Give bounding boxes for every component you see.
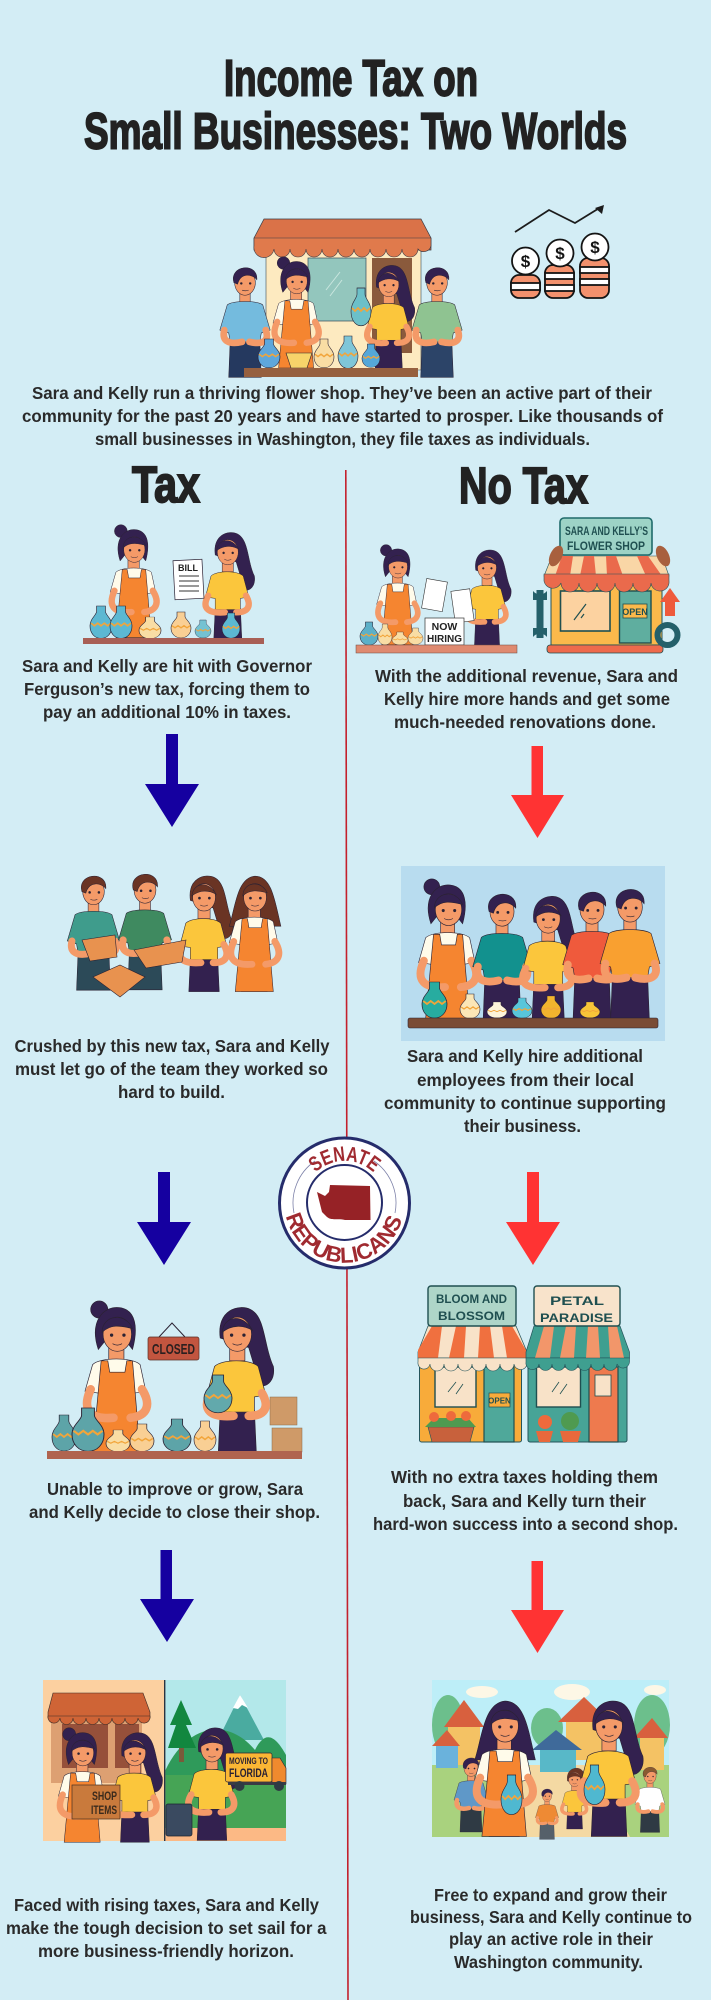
caption: Unable to improve or grow, Sara xyxy=(47,1479,303,1499)
arrow xyxy=(511,1561,564,1653)
intro text: Sara and Kelly run a thriving flower shop. They’ve been an active part of their xyxy=(32,383,652,403)
illustration: owners closing shop xyxy=(47,1301,302,1459)
arrow xyxy=(137,1172,191,1265)
icon: coin stacks with rising trend arrow: $ xyxy=(521,252,531,271)
title xyxy=(84,50,627,160)
heading: No Tax: No Tax xyxy=(459,457,588,514)
arrow xyxy=(145,734,199,827)
panel: no tax step 2 xyxy=(384,866,666,1265)
intro text: small businesses in Washington, they file taxes as individuals. xyxy=(95,429,590,449)
illustration: leaving shop and moving to Florida xyxy=(43,1680,286,1842)
panel: tax step 3 xyxy=(29,1301,320,1642)
caption xyxy=(14,1036,330,1102)
caption: Kelly hire more hands and get some xyxy=(384,689,670,709)
illustration: two flower shops: OPEN xyxy=(488,1396,511,1406)
panel: tax step 1 xyxy=(22,525,312,827)
intro text xyxy=(22,383,663,449)
illustration: growing team behind counter xyxy=(401,866,665,1041)
caption: Sara and Kelly hire additional xyxy=(407,1046,643,1066)
illustration: renovated flower shop: OPEN xyxy=(622,607,648,617)
illustration: staff packing boxes xyxy=(67,874,281,997)
caption: Washington community. xyxy=(454,1952,643,1972)
title: Income Tax on xyxy=(224,50,478,106)
panel: no tax step 1 xyxy=(356,518,680,838)
caption: Crushed by this new tax, Sara and Kelly xyxy=(14,1036,330,1056)
illustration: shop with owners and customers xyxy=(220,219,462,377)
caption: play an active role in their xyxy=(449,1929,653,1949)
caption: back, Sara and Kelly turn their xyxy=(403,1491,646,1511)
illustration: two flower shops: PETAL xyxy=(550,1294,604,1308)
illustration: leaving shop and moving to Florida: SHOP xyxy=(92,1791,117,1803)
caption: pay an additional 10% in taxes. xyxy=(43,702,291,722)
panel: tax step 2 xyxy=(14,874,330,1265)
logo: Senate Republicans xyxy=(278,1136,411,1270)
icon: coin stacks with rising trend arrow: $ xyxy=(555,244,565,263)
caption: With no extra taxes holding them xyxy=(391,1467,658,1487)
sign: closed xyxy=(148,1323,199,1360)
illustration: renovated flower shop: FLOWER SHOP xyxy=(567,539,645,553)
caption: more business-friendly horizon. xyxy=(38,1941,294,1961)
icon: coin stacks with rising trend arrow: $ xyxy=(590,238,600,257)
caption: Sara and Kelly are hit with Governor xyxy=(22,656,312,676)
caption: much-needed renovations done. xyxy=(394,712,656,732)
caption: and Kelly decide to close their shop. xyxy=(29,1502,320,1522)
illustration: leaving shop and moving to Florida: MOVING TO xyxy=(229,1756,268,1766)
illustration: worried owners reading bill: BILL xyxy=(178,563,198,574)
caption: hard-won success into a second shop. xyxy=(373,1514,678,1534)
caption: Faced with rising taxes, Sara and Kelly xyxy=(14,1895,319,1915)
caption xyxy=(373,1467,678,1534)
caption: community to continue supporting xyxy=(384,1093,666,1113)
sign: now hiring xyxy=(425,618,464,645)
arrow xyxy=(511,746,564,838)
intro text: community for the past 20 years and have started to prosper. Like thousands of xyxy=(22,406,663,426)
caption: must let go of the team they worked so xyxy=(15,1059,328,1079)
illustration: two flower shops xyxy=(418,1286,630,1442)
illustration: two flower shops: BLOOM AND xyxy=(436,1292,507,1306)
sign: now hiring: NOW xyxy=(432,621,457,633)
caption: their business. xyxy=(464,1116,581,1136)
panel: no tax step 4 xyxy=(410,1680,692,1972)
panel: no tax step 3 xyxy=(373,1286,678,1653)
caption: With the additional revenue, Sara and xyxy=(375,666,678,686)
illustration: renovated flower shop xyxy=(533,518,680,653)
arrow xyxy=(506,1172,560,1265)
arrow xyxy=(140,1550,194,1642)
caption: employees from their local xyxy=(417,1070,634,1090)
caption: Free to expand and grow their xyxy=(434,1885,667,1905)
illustration: renovated flower shop: SARA AND KELLY’S xyxy=(565,524,648,538)
caption xyxy=(384,1046,666,1136)
panel: tax step 4 xyxy=(6,1680,327,1961)
logo: Senate Republicans: SENATE xyxy=(308,1146,382,1172)
illustration: owners in thriving community xyxy=(432,1680,670,1839)
illustration: two flower shops: BLOSSOM xyxy=(438,1309,505,1323)
caption: Ferguson’s new tax, forcing them to xyxy=(24,679,310,699)
logo: Senate Republicans: REPUBLICANS xyxy=(286,1212,401,1263)
caption xyxy=(22,656,312,722)
caption: hard to build. xyxy=(118,1082,225,1102)
illustration: leaving shop and moving to Florida: ITEMS xyxy=(91,1805,117,1817)
sign: closed: CLOSED xyxy=(152,1341,195,1358)
illustration: two flower shops: PARADISE xyxy=(540,1311,613,1325)
heading: Tax: Tax xyxy=(132,456,200,513)
illustration: owners hiring xyxy=(356,545,517,653)
caption xyxy=(375,666,678,732)
caption xyxy=(410,1885,692,1972)
caption: make the tough decision to set sail for a xyxy=(6,1918,327,1938)
icon: coin stacks with rising trend arrow xyxy=(511,205,609,298)
caption xyxy=(29,1479,320,1522)
illustration: leaving shop and moving to Florida: FLORIDA xyxy=(229,1766,268,1780)
panel: introduction xyxy=(22,205,663,449)
caption: business, Sara and Kelly continue to xyxy=(410,1907,692,1927)
illustration: worried owners reading bill xyxy=(83,525,264,644)
sign: now hiring: HIRING xyxy=(427,634,462,645)
caption xyxy=(6,1895,327,1961)
